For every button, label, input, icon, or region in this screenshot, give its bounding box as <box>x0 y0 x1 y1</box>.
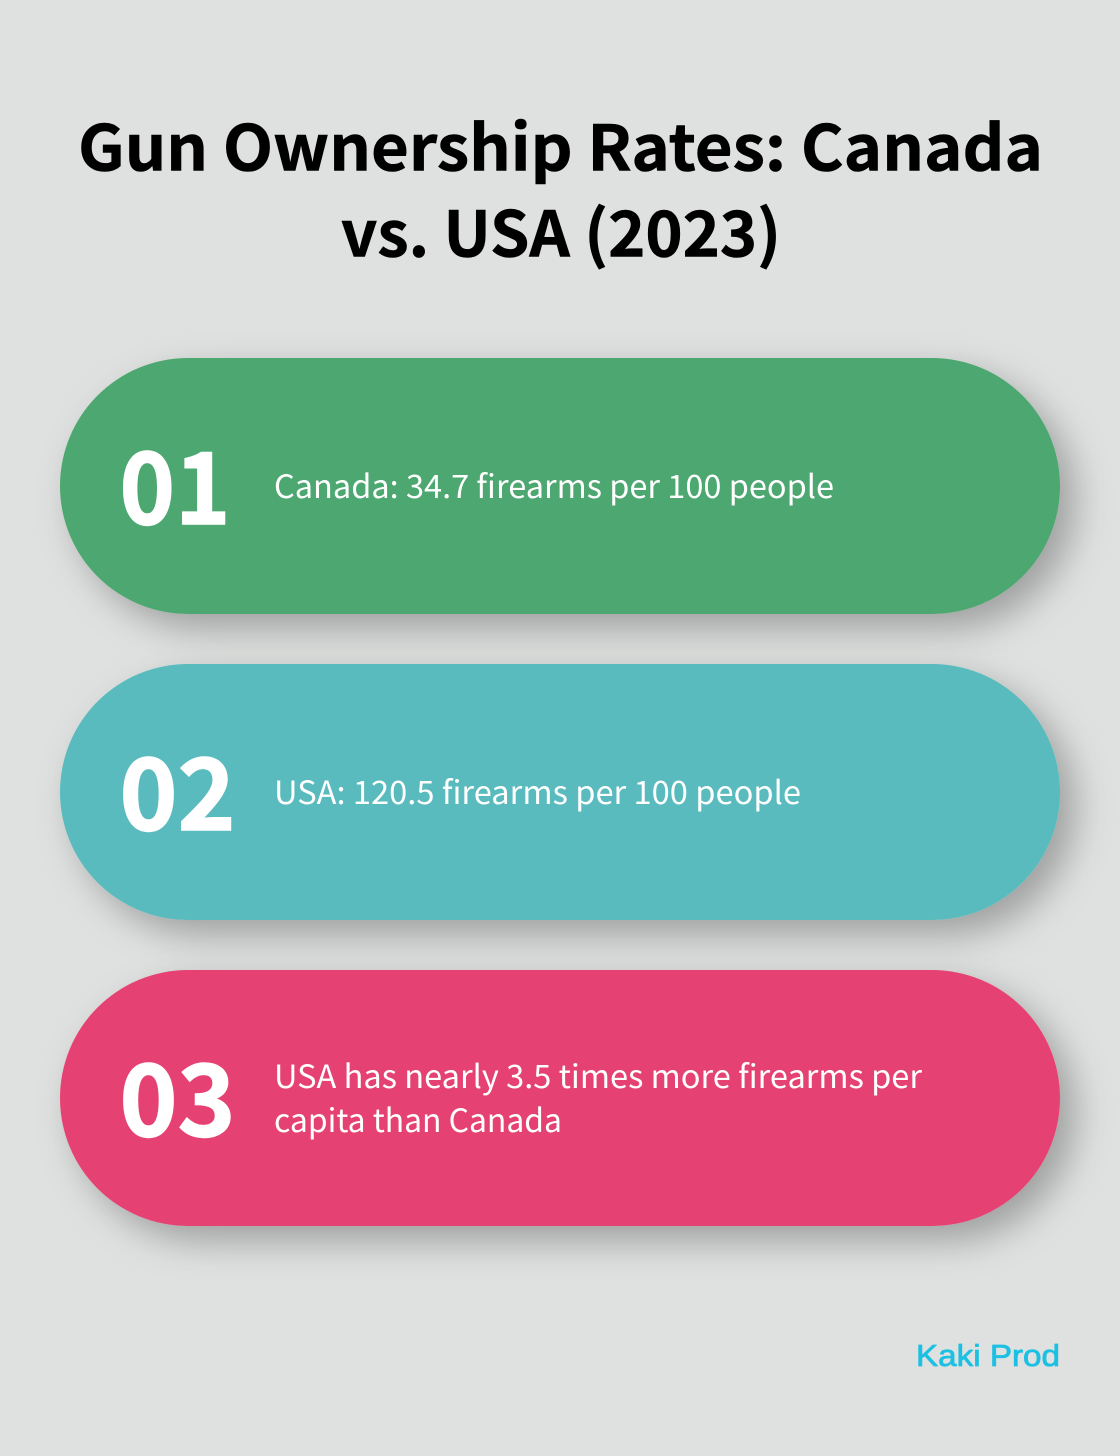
pill: green <box>60 358 1060 614</box>
text: USA: USA: 120.5 firearms per 100 people <box>274 768 801 814</box>
pill: pink <box>60 970 1060 1226</box>
number 01: 01 <box>120 409 230 553</box>
panel: Canada <box>60 358 1060 614</box>
text: comparison <box>274 1052 923 1142</box>
text: Canada: Canada: 34.7 firearms per 100 people <box>274 462 834 508</box>
panel: USA <box>60 664 1060 920</box>
title: vs. USA (2023) <box>341 184 781 276</box>
number 02: 02 <box>120 715 236 859</box>
text: comparison: capita than Canada <box>274 1096 562 1142</box>
number 03: 03 <box>120 1021 236 1165</box>
pill: teal <box>60 664 1060 920</box>
text: comparison: USA has nearly 3.5 times more firearms per <box>274 1052 923 1098</box>
panel: comparison <box>60 970 1060 1226</box>
title: Gun Ownership Rates: Canada <box>78 98 1043 190</box>
logo: Kaki Prod: Kaki Prod <box>916 1338 1060 1373</box>
title <box>78 98 1043 276</box>
